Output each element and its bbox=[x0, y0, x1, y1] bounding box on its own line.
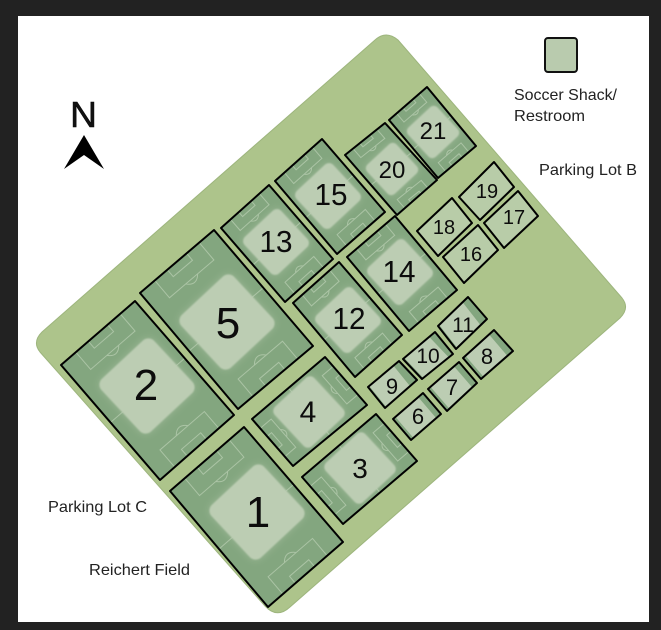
field 13: 13 bbox=[260, 224, 292, 259]
legend: soccer shack and restroom bbox=[514, 38, 618, 125]
field 12 bbox=[293, 262, 402, 377]
field 8 bbox=[463, 330, 513, 379]
field 18 bbox=[417, 198, 472, 256]
field 2: 2 bbox=[134, 361, 158, 410]
label: parking lot B: Parking Lot B bbox=[539, 162, 637, 179]
field 7 bbox=[428, 362, 477, 411]
field 14: 14 bbox=[382, 254, 416, 289]
field 11 bbox=[438, 297, 487, 349]
field 4 bbox=[252, 357, 367, 466]
field 17: 17 bbox=[503, 207, 525, 229]
field 21: 21 bbox=[420, 118, 446, 145]
label: Reichert Field: Reichert Field bbox=[89, 562, 190, 579]
field 8: 8 bbox=[481, 344, 493, 369]
north arrow: N bbox=[70, 94, 97, 135]
field 15 bbox=[275, 139, 385, 254]
field 6: 6 bbox=[412, 404, 424, 429]
field 5: 5 bbox=[216, 299, 240, 348]
legend: soccer shack and restroom: Soccer Shack/ bbox=[514, 87, 618, 104]
field 1: 1 bbox=[246, 488, 270, 537]
field 6 bbox=[393, 393, 441, 440]
field 4: 4 bbox=[300, 396, 316, 429]
field 13 bbox=[221, 185, 333, 302]
label: parking lot C: Parking Lot C bbox=[48, 499, 147, 516]
field 9: 9 bbox=[386, 374, 398, 399]
field 10 bbox=[403, 332, 453, 379]
field 11: 11 bbox=[452, 314, 474, 337]
field 3 bbox=[302, 414, 417, 524]
field 3: 3 bbox=[352, 453, 368, 484]
field 2 bbox=[61, 301, 234, 480]
field 20: 20 bbox=[379, 157, 405, 184]
field 16 bbox=[443, 225, 498, 283]
field 17 bbox=[484, 191, 538, 248]
north arrow bbox=[64, 94, 104, 169]
field 20 bbox=[345, 123, 437, 215]
field 19 bbox=[459, 162, 514, 220]
field 1 bbox=[170, 427, 343, 607]
field 15: 15 bbox=[314, 177, 348, 212]
field 12: 12 bbox=[332, 301, 366, 336]
field 14 bbox=[347, 216, 457, 331]
field 21 bbox=[389, 87, 476, 178]
field 9 bbox=[368, 361, 417, 408]
field 18: 18 bbox=[433, 217, 455, 239]
field 7: 7 bbox=[446, 375, 458, 400]
field 5 bbox=[140, 230, 313, 409]
field 10: 10 bbox=[416, 345, 440, 368]
legend: soccer shack and restroom: Restroom bbox=[514, 108, 585, 125]
field 19: 19 bbox=[476, 181, 498, 203]
field 16: 16 bbox=[460, 244, 482, 266]
